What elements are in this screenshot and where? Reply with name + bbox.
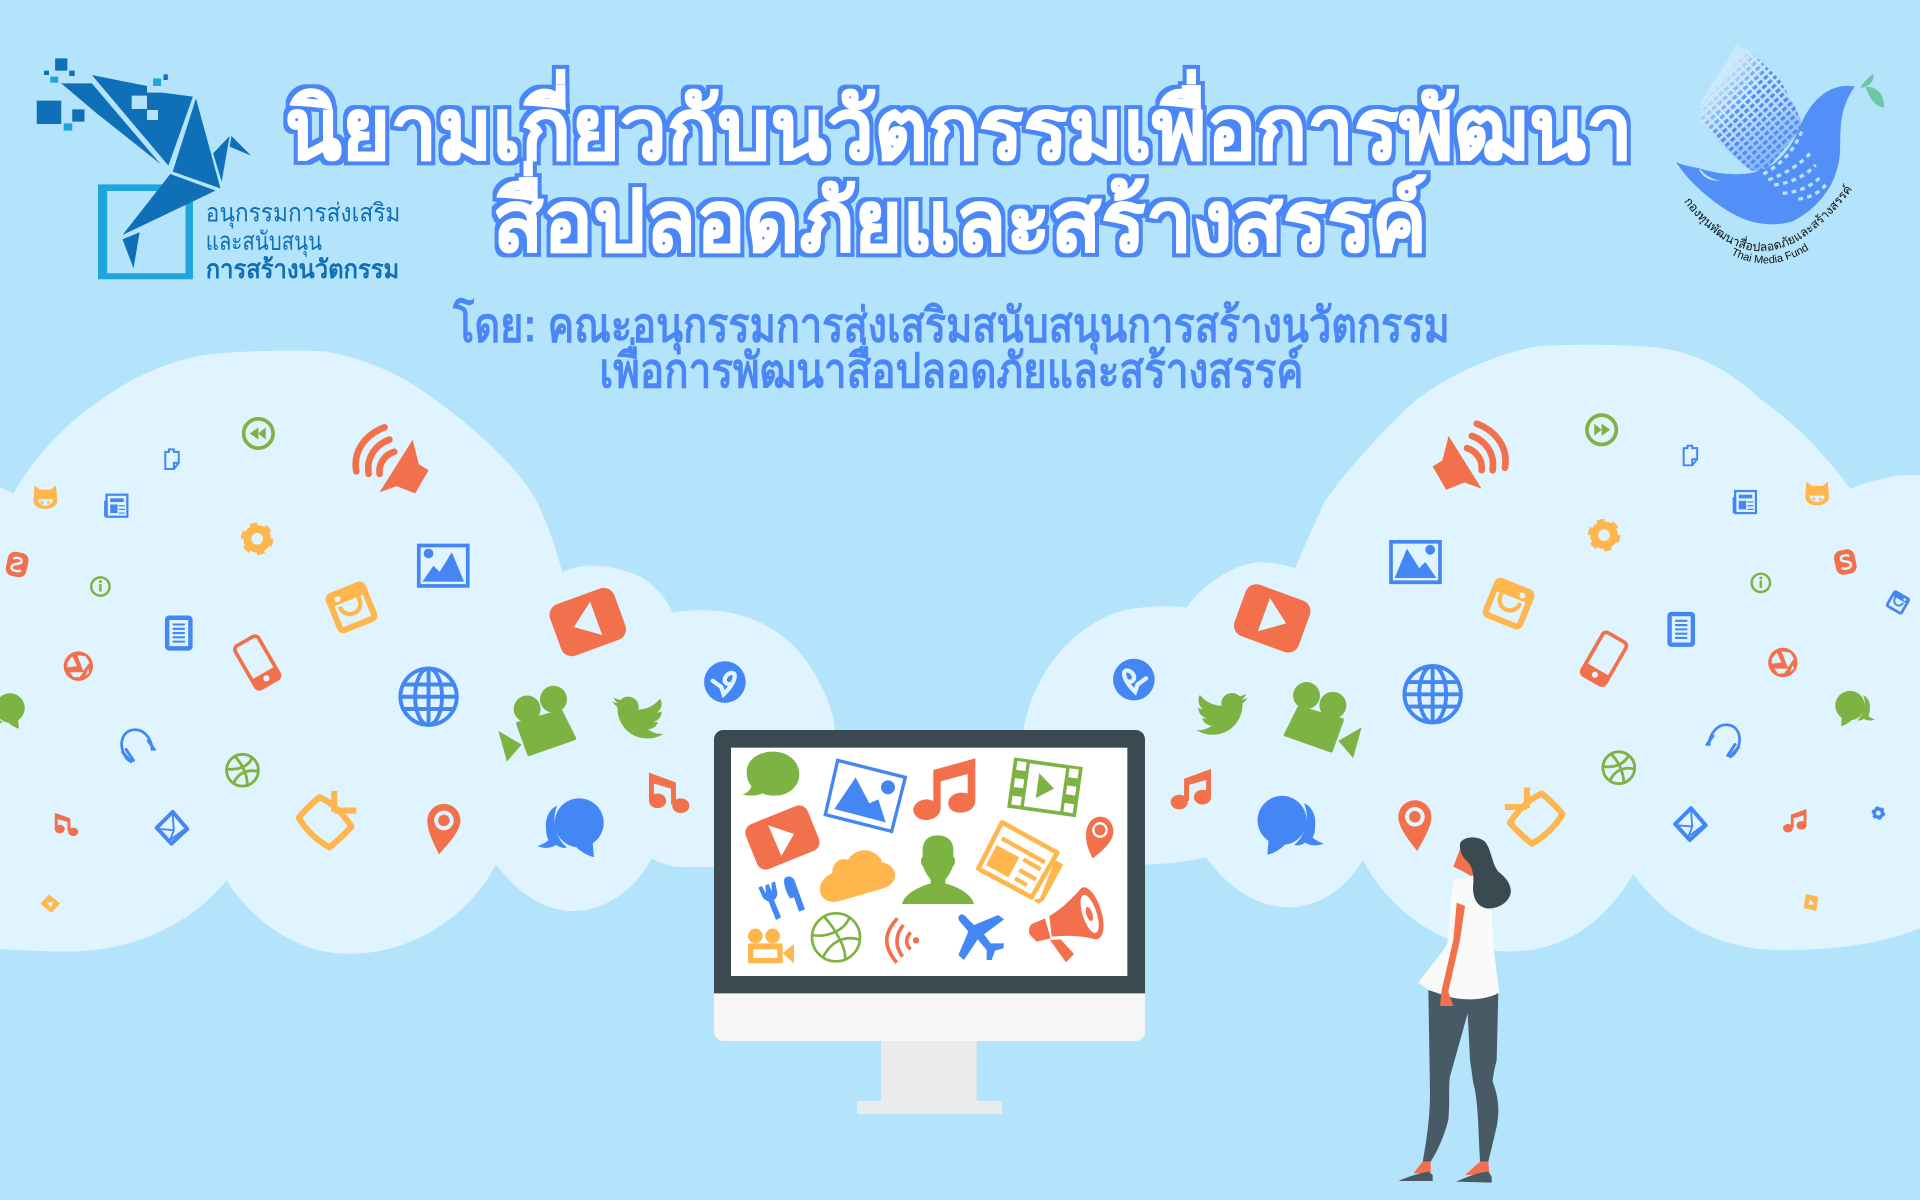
icon: picture (1389, 540, 1442, 584)
icon: mail (1675, 808, 1706, 840)
icon: dribbble (227, 754, 258, 786)
icon: newspaper (104, 495, 127, 517)
screen icon: dribbble (812, 913, 861, 961)
logo: innovation subcommittee (37, 58, 400, 284)
icon: movie camera (1286, 682, 1362, 758)
fund english name: Thai Media Fund (1733, 243, 1808, 264)
icon: small video (1799, 891, 1823, 914)
logo wordmark (206, 200, 400, 284)
icon: instagram (1485, 579, 1533, 628)
icon: movie camera (498, 686, 574, 762)
icon: phone (233, 635, 281, 690)
icon: chat (1258, 796, 1324, 855)
desktop monitor (714, 730, 1145, 1114)
feet (1413, 1162, 1489, 1175)
screen icon: picture (825, 760, 905, 831)
screen icon: cloud (820, 850, 895, 902)
screen icon: newspaper (978, 822, 1063, 904)
icon: twitter (1196, 693, 1248, 735)
icon: cat (1805, 482, 1829, 505)
icon: picasa (1768, 648, 1798, 677)
icon: vimeo (704, 661, 746, 703)
icon: info (91, 577, 110, 596)
monitor chin (714, 990, 1145, 1041)
icon: mail (157, 812, 187, 844)
icon: small music note (1783, 809, 1806, 832)
icon: headphones (122, 730, 154, 762)
screen icon: movie camera (748, 929, 794, 963)
screen icon: speech bubble (742, 752, 799, 796)
screen icon: film strip (1007, 757, 1083, 817)
subtitle: เพื่อการพัฒนาสื่อปลอดภัยและสร้างสรรค์ (599, 337, 1303, 398)
icon: forward (1587, 415, 1616, 444)
shirt (1418, 875, 1499, 999)
icon: music note (649, 773, 689, 813)
left cloud (0, 350, 835, 954)
icon: picasa (64, 651, 93, 681)
fund name curved text: กองทุนพัฒนาสื่อปลอดภัยและสร้างสรรค์ (1684, 183, 1852, 252)
icon: newspaper (1733, 491, 1756, 513)
main title: นิยามเกี่ยวกับนวัตกรรมเพื่อการพัฒนา (285, 69, 1633, 178)
icon: clipboard (1684, 446, 1697, 465)
icon: info (1752, 574, 1770, 592)
icon: video (1231, 581, 1314, 656)
screen icon: airplane (958, 914, 1004, 960)
screen icon: music note (913, 758, 975, 820)
icon: speech bubbles (0, 693, 25, 729)
icon: twitter (612, 697, 664, 738)
icon: music note (1171, 769, 1211, 809)
icon: clipboard (165, 449, 179, 469)
icon: phone (1580, 631, 1628, 687)
screen icon: megaphone (1029, 887, 1104, 962)
icon: television (299, 791, 356, 847)
logo wordmark: และสนับสนุน (206, 228, 322, 257)
icon: picture (417, 544, 470, 588)
icon: document (167, 618, 190, 648)
icon: headphones (1707, 725, 1740, 757)
icon: document (1670, 614, 1693, 645)
subtitle (452, 297, 1450, 398)
screen icon: location pin (1086, 817, 1113, 858)
icon: speech bubbles (1835, 691, 1875, 726)
icon: chat (538, 798, 604, 857)
woman figure (1398, 837, 1511, 1183)
screen icon: video (742, 803, 822, 872)
icon: video (546, 585, 629, 659)
logo origami bird (37, 58, 251, 268)
monitor screen (731, 748, 1127, 976)
icon: small instagram (1887, 591, 1910, 614)
monitor bezel (714, 730, 1145, 993)
left cloud icons (0, 419, 746, 915)
icon: skype (4, 550, 30, 579)
right cloud (1024, 345, 1920, 951)
legs (1423, 988, 1498, 1162)
main title: สื่อปลอดภัยและสร้างสรรค์ (493, 161, 1427, 270)
shoes (1398, 1172, 1492, 1183)
icon: television (1505, 787, 1562, 844)
icon: small gear (1873, 807, 1884, 819)
icon: gear (1591, 522, 1618, 549)
icon: small music note (55, 813, 78, 836)
screen icon: person (902, 835, 974, 904)
logo wordmark: อนุกรรมการส่งเสริม (206, 200, 400, 229)
icon: globe (1404, 666, 1461, 722)
main title (285, 69, 1633, 270)
hair (1460, 837, 1511, 908)
logo frame (98, 184, 193, 279)
icon: location pin (1397, 799, 1435, 853)
icon: location pin (424, 802, 462, 856)
subtitle: โดย: คณะอนุกรรมการส่งเสริมสนับสนุนการสร้างนวัตกรรม (452, 297, 1450, 356)
screen icon: wifi signal (887, 918, 917, 963)
screen icon: cutlery (758, 876, 805, 920)
icon: instagram (327, 582, 375, 631)
icon: rewind (244, 419, 273, 448)
logo: Thai Media Fund dove (1676, 44, 1884, 264)
logo wordmark: การสร้างนวัตกรรม (206, 256, 399, 284)
right cloud icons (1113, 415, 1910, 914)
icon: speaker (356, 427, 429, 493)
dove artwork (1676, 43, 1884, 224)
arm (1440, 903, 1465, 1006)
icon: speaker (1433, 424, 1506, 490)
icon: small video (38, 892, 62, 915)
icon: gear (244, 525, 271, 552)
monitor stand (857, 1040, 1002, 1114)
icon: vimeo (1113, 659, 1155, 700)
icon: globe (400, 669, 457, 725)
icon: dribbble (1603, 752, 1635, 784)
icon: skype (1833, 548, 1858, 576)
icon: cat (33, 485, 57, 509)
face (1453, 845, 1475, 878)
